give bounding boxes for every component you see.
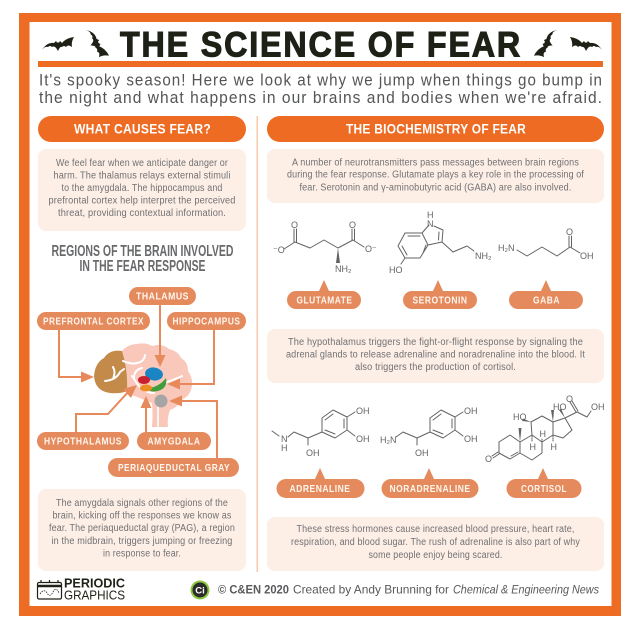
- label: gaba: [509, 280, 583, 309]
- label: noradrenaline: NORADRENALINE: [390, 484, 470, 495]
- label: noradrenaline: [382, 468, 478, 498]
- arrow: prefrontal cortex: [59, 330, 94, 382]
- panel: hypothalamus text: adrenal glands to release adrenaline and noradrenaline into the blood. It: [286, 350, 585, 360]
- panel: neurotransmitters text: during the fear response. Glutamate plays a key role in the processing of: [287, 170, 584, 180]
- label: amygdala: [137, 432, 211, 450]
- label: periaqueductal gray: [108, 458, 239, 477]
- heading: what causes fear: WHAT CAUSES FEAR?: [74, 122, 211, 136]
- brain: hippocampus: [150, 378, 166, 392]
- icon: periodic graphics calendar logo: [38, 580, 62, 599]
- panel: amygdala text: in response to fear.: [103, 548, 181, 560]
- label: serotonin: [403, 280, 477, 309]
- icon: C&EN logo: Ci: [195, 586, 205, 596]
- molecule: glutamate: NH₂: [335, 264, 352, 274]
- molecule: noradrenaline: H₂N: [380, 435, 396, 445]
- label: hypothalamus: [37, 432, 129, 450]
- panel: amygdala text: [38, 489, 246, 571]
- panel: what causes fear text: to the amygdala. The hippocampus and: [62, 183, 222, 194]
- molecule: gaba: O: [566, 227, 573, 237]
- label: prefrontal cortex: [37, 312, 150, 330]
- panel: what causes fear text: We feel fear when we anticipate danger or: [56, 158, 228, 169]
- label: glutamate: GLUTAMATE: [296, 296, 352, 306]
- molecule: serotonin: NH₂: [475, 251, 492, 261]
- molecule: cortisol: HO: [553, 402, 566, 412]
- intro text: [39, 72, 603, 107]
- panel: stress hormones text: These stress hormones cause increased blood pressure, heart rate,: [296, 524, 574, 535]
- arrow: thalamus: [154, 305, 166, 367]
- label: serotonin: SEROTONIN: [412, 296, 468, 306]
- brain: midbrain and cortex: [122, 343, 192, 427]
- molecule: serotonin: H: [427, 210, 434, 220]
- label: adrenaline: [276, 468, 364, 498]
- intro text: the night and what happens in our brains and bodies when we're afraid.: [39, 89, 603, 107]
- arrow: periaqueductal gray: [169, 396, 217, 458]
- panel: amygdala text: fear. The periaqueductal gray (PAG), a region: [49, 523, 235, 534]
- credit line: © C&EN 2020: [218, 582, 289, 596]
- label: hippocampus: [167, 312, 246, 330]
- molecule: noradrenaline: OH: [415, 448, 428, 458]
- panel: neurotransmitters text: fear. Serotonin and γ-aminobutyric acid (GABA) are also involved.: [300, 182, 572, 194]
- panel: what causes fear text: harm. The thalamus relays external stimuli: [54, 170, 230, 182]
- heading: what causes fear: [38, 116, 246, 142]
- label: cortisol: CORTISOL: [521, 484, 567, 495]
- molecule: glutamate: ⁻O: [273, 245, 285, 255]
- molecule: cortisol: [485, 394, 604, 464]
- label: periaqueductal gray: PERIAQUEDUCTAL GRAY: [118, 463, 230, 474]
- molecule: glutamate: [273, 220, 377, 274]
- credit line: Chemical & Engineering News: [453, 582, 599, 596]
- label: amygdala: AMYGDALA: [148, 436, 200, 448]
- panel: hypothalamus text: [267, 329, 604, 383]
- molecule: noradrenaline: OH: [464, 434, 478, 444]
- label: prefrontal cortex: PREFRONTAL CORTEX: [43, 316, 144, 328]
- brain: periaqueductal gray: [154, 394, 168, 408]
- panel: neurotransmitters text: A number of neurotransmitters pass messages between brain regions: [292, 158, 579, 168]
- icon: bat left outer: [42, 37, 74, 51]
- molecule: gaba: OH: [580, 251, 594, 261]
- panel: amygdala text: in the midbrain, triggers jumping or freezing: [52, 536, 232, 547]
- molecule: gaba: H₂N: [498, 243, 514, 253]
- label: hippocampus: HIPPOCAMPUS: [172, 316, 240, 328]
- molecule: glutamate: O: [291, 220, 298, 230]
- panel: stress hormones text: respiration, and blood sugar. The rush of adrenaline is also part of why: [291, 537, 580, 548]
- brain: thalamus: [144, 366, 164, 382]
- molecule: adrenaline: H: [281, 443, 288, 453]
- molecule: serotonin: HO: [389, 265, 402, 275]
- heading: regions of the brain: IN THE FEAR RESPONSE: [80, 258, 206, 275]
- molecule: noradrenaline: OH: [464, 406, 478, 416]
- title: THE SCIENCE OF FEAR: [120, 26, 522, 64]
- icon: bat left inner: [85, 26, 109, 60]
- arrow: amygdala: [140, 396, 152, 432]
- panel: amygdala text: brain, kicking off the responses we know as: [52, 510, 232, 522]
- panel: stress hormones text: some people enjoy being scared.: [368, 550, 502, 561]
- label: glutamate: [287, 280, 361, 309]
- panel: what causes fear text: [38, 149, 246, 231]
- heading: the biochemistry of fear: THE BIOCHEMISTRY OF FEAR: [346, 122, 526, 136]
- molecule: cortisol: H: [550, 442, 557, 452]
- icon: bat right outer: [570, 37, 602, 51]
- logo text: periodic graphics: PERIODIC: [64, 576, 125, 590]
- panel: hypothalamus text: The hypothalamus triggers the fight-or-flight response by signaling the: [288, 337, 583, 348]
- heading: regions of the brain: [52, 243, 234, 275]
- molecule: glutamate: O⁻: [365, 244, 377, 254]
- icon: bat right inner: [534, 26, 558, 60]
- molecule: noradrenaline: [380, 406, 478, 458]
- brain: hypothalamus: [138, 376, 150, 384]
- molecule: adrenaline: OH: [356, 406, 370, 416]
- brain: amygdala: [140, 384, 152, 392]
- panel: stress hormones text: [267, 517, 604, 571]
- molecule: cortisol: HO: [513, 412, 526, 422]
- logo text: periodic graphics: [64, 576, 125, 602]
- molecule: cortisol: O: [485, 454, 492, 464]
- molecule: cortisol: H: [530, 442, 536, 452]
- molecule: cortisol: H: [540, 429, 546, 439]
- heading: regions of the brain: REGIONS OF THE BRAIN INVOLVED: [52, 243, 234, 260]
- arrow: hypothalamus: [76, 385, 137, 432]
- heading: the biochemistry of fear: [267, 116, 604, 142]
- molecule: adrenaline: OH: [306, 448, 320, 458]
- label: hypothalamus: HYPOTHALAMUS: [44, 436, 122, 448]
- diagram: brain regions: [37, 287, 246, 477]
- molecule: gaba: [498, 227, 594, 261]
- credit line: Created by Andy Brunning for: [293, 582, 449, 596]
- panel: neurotransmitters text: [267, 149, 604, 203]
- panel: what causes fear text: threat, providing contextual information.: [58, 208, 226, 219]
- brain: prefrontal lobe: [94, 351, 127, 393]
- molecule: cortisol: OH: [591, 402, 604, 412]
- arrow: hippocampus: [167, 330, 214, 390]
- label: adrenaline: ADRENALINE: [290, 484, 350, 495]
- label: gaba: GABA: [533, 296, 560, 306]
- label: thalamus: THALAMUS: [136, 292, 189, 302]
- brain: white folds: [105, 355, 182, 426]
- molecule: serotonin: [389, 210, 492, 275]
- molecule: serotonin: N: [427, 219, 434, 229]
- molecule: adrenaline: [272, 406, 370, 458]
- molecule: cortisol: O: [566, 394, 573, 404]
- molecule: adrenaline: N: [281, 434, 288, 444]
- label: cortisol: [506, 468, 582, 498]
- label: thalamus: [129, 287, 196, 305]
- molecule: adrenaline: OH: [356, 434, 370, 444]
- panel: amygdala text: The amygdala signals other regions of the: [56, 498, 228, 509]
- panel: hypothalamus text: also triggers the production of cortisol.: [355, 362, 516, 373]
- molecule: glutamate: O: [349, 220, 356, 230]
- credit line: [218, 582, 599, 596]
- logo text: periodic graphics: GRAPHICS: [64, 588, 125, 602]
- icon: C&EN logo: [190, 580, 210, 600]
- intro text: It's spooky season! Here we look at why we jump when things go bump in: [39, 72, 603, 90]
- panel: what causes fear text: prefrontal cortex help interpret the perceived: [48, 196, 236, 206]
